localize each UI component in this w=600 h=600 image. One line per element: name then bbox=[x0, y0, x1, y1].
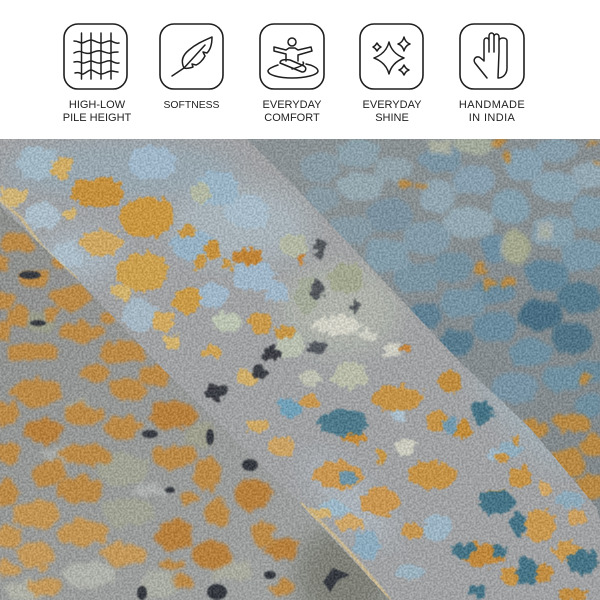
photo: rug background, orange scale pattern bbox=[0, 200, 395, 600]
label: everyday shine: EVERYDAY bbox=[363, 99, 421, 111]
teal and dark patches on band bbox=[205, 240, 598, 598]
icon: handmade hand bbox=[460, 24, 524, 89]
feature icons row bbox=[63, 24, 525, 124]
icon: everyday comfort meditation bbox=[260, 24, 324, 89]
label: handmade in india: HANDMADE bbox=[459, 99, 525, 111]
pale green patches on band bbox=[190, 182, 415, 456]
photo: rug background, blue scale pattern bbox=[240, 138, 600, 529]
label: everyday comfort: COMFORT bbox=[264, 112, 320, 124]
label: everyday comfort: EVERYDAY bbox=[263, 99, 321, 111]
photo grain texture bbox=[0, 139, 600, 600]
orange patches on band bbox=[0, 156, 597, 600]
cream band edge highlight bbox=[0, 200, 390, 600]
rug photo bbox=[0, 138, 600, 600]
photo: rolled rug foreground band bbox=[0, 139, 600, 600]
icon: everyday shine sparkles bbox=[360, 24, 423, 89]
icon: softness feather bbox=[160, 24, 223, 89]
label: high-low pile height: PILE HEIGHT bbox=[63, 112, 132, 124]
label: softness: SOFTNESS bbox=[163, 100, 220, 111]
label: handmade in india: IN INDIA bbox=[469, 112, 516, 124]
label: high-low pile height: HIGH-LOW bbox=[69, 99, 125, 111]
label: everyday shine: SHINE bbox=[375, 112, 409, 124]
icon: high-low pile height bbox=[64, 24, 127, 89]
blue patches on band bbox=[17, 146, 584, 581]
